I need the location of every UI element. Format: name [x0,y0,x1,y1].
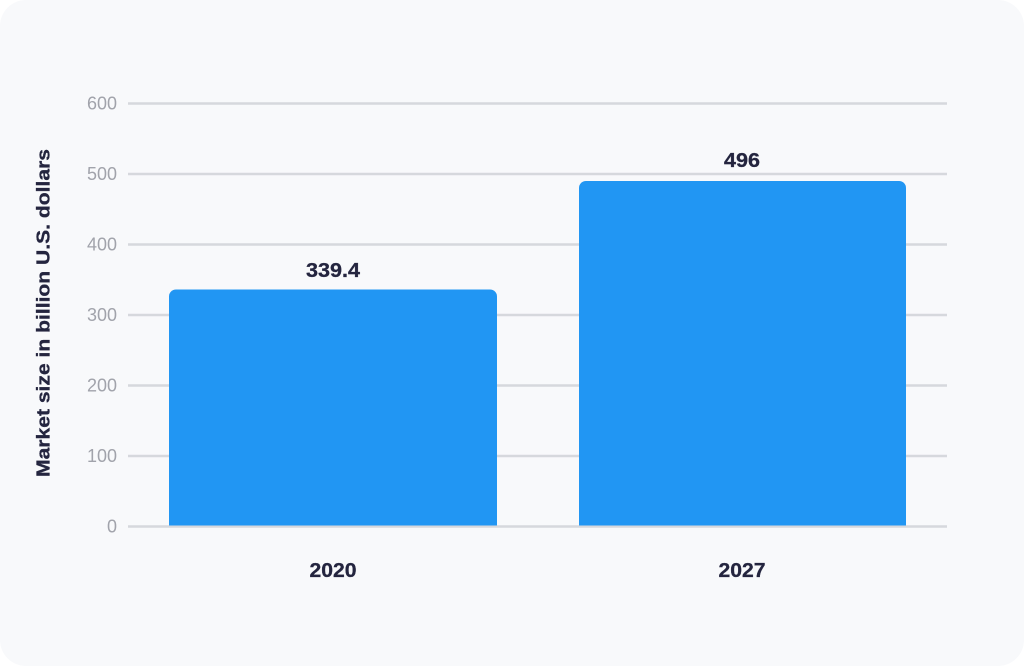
bar chart [32,94,947,582]
y-axis title: Market size in billion U.S. dollars [32,149,54,477]
bar: 2020 [169,290,497,526]
category label: 2027: 2027 [718,560,766,582]
y-axis tick labels: 200 [87,376,117,396]
value label: 2027: 496 [724,150,760,172]
y-axis tick labels [87,94,117,536]
category label: 2020: 2020 [310,560,356,582]
y-axis tick labels: 0 [107,516,117,536]
value label: 2020: 339.4 [306,260,361,282]
y-axis tick labels: 300 [87,305,117,325]
y-axis tick labels: 100 [87,446,117,466]
y-axis tick labels: 500 [87,164,117,184]
bar: 2027 [579,181,906,526]
y-axis tick labels: 400 [87,234,117,254]
y-axis tick labels: 600 [87,94,117,114]
